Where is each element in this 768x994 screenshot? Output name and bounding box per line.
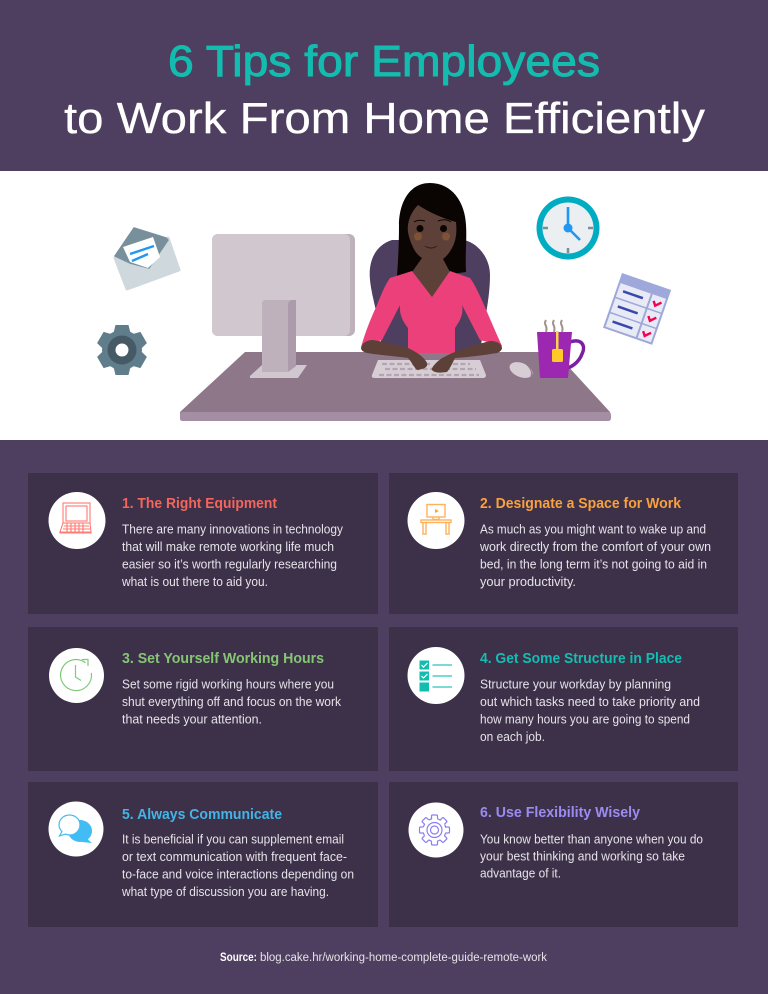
heading: 3. Set Yourself Working Hours [122,651,324,667]
icon: desk [408,492,464,549]
text block: Set some rigid working hours where you [122,678,334,692]
text block [121,832,354,899]
icon: clock outline [49,648,104,703]
title: to Work From Home Efficiently [64,94,705,143]
panel: tip 6 [389,782,738,927]
text block [480,678,700,744]
text block: easier so it’s worth regularly researching [122,558,337,572]
panel: tip 1 [28,473,378,614]
hair [397,183,466,276]
text block: that will make remote working life much [122,540,334,554]
shirt [361,271,502,353]
face and neck [408,205,456,300]
text block: on each job. [480,730,545,744]
text block: out which tasks need to take priority and [480,695,700,709]
text block: or text communication with frequent face- [122,850,347,864]
text block [122,678,342,726]
heading: 6. Use Flexibility Wisely [480,805,641,821]
panel: tip 3 [28,627,378,771]
source: blog.cake.hr/working-home-complete-guide-remote-work [260,952,547,964]
text block: Structure your workday by planning [480,678,671,692]
forearms [361,340,427,370]
source: Source: [220,952,257,964]
heading: 5. Always Communicate [122,807,282,823]
text block: to-face and voice interactions depending on [122,868,354,882]
text block: shut everything off and focus on the work [122,695,342,709]
desk [180,352,611,421]
icon: envelope [115,228,179,289]
icon: laptop [48,492,106,549]
text block: how many hours you are going to spend [480,712,690,726]
heading: 4. Get Some Structure in Place [480,651,682,667]
text block [479,522,711,589]
text block: work directly from the comfort of your own [479,540,711,554]
text block: bed, in the long term it’s not going to aid in [480,558,707,572]
icon: speech bubbles [48,802,104,856]
text block: It is beneficial if you can supplement email [122,832,344,846]
title: 6 Tips for Employees [168,37,600,86]
text block: that needs your attention. [122,712,262,726]
text block [480,832,703,880]
panel: tip 2 [389,473,738,614]
heading: 2. Designate a Space for Work [480,496,682,512]
illustration panel [0,171,768,440]
title [64,37,705,143]
icon: checklist [603,273,671,345]
monitor stand [250,300,307,378]
icon: checklist outline [408,647,464,704]
icon: clock [536,196,600,260]
text block: You know better than anyone when you do [480,832,703,846]
icon: gear [96,325,148,375]
keyboard [372,360,486,378]
woman [361,183,502,373]
mug [537,320,584,378]
panel: tip 5 [28,782,378,927]
text block [121,522,344,589]
panel: tip 4 [389,627,738,771]
text block: your best thinking and working so take [480,850,685,864]
heading: 1. The Right Equipment [122,496,277,512]
text block: your productivity. [480,575,576,589]
text block: As much as you might want to wake up and [480,522,706,536]
mouse [507,359,535,381]
chair [370,240,490,354]
text block: what is out there to aid you. [121,575,268,589]
icon: gear outline [408,802,464,858]
text block: advantage of it. [480,866,561,880]
text block: There are many innovations in technology [122,522,344,536]
text block: what type of discussion you are having. [121,885,329,899]
monitor [212,234,355,336]
